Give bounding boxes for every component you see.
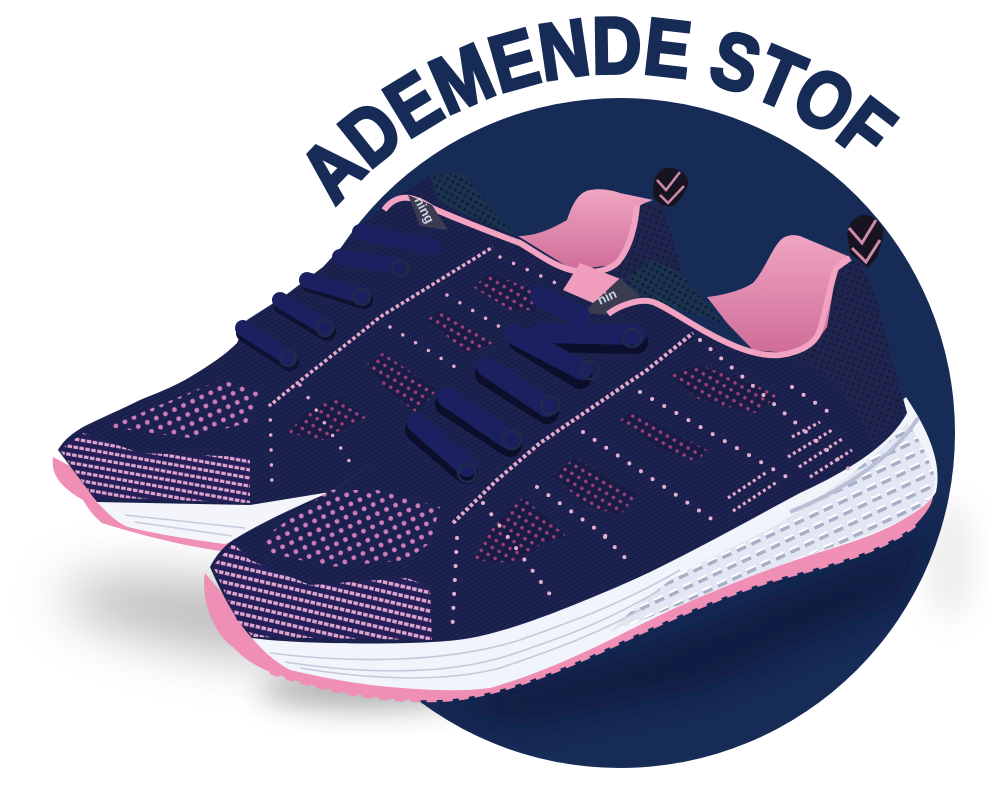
back shoe upper [58, 172, 682, 505]
back shoe midsole [95, 485, 340, 544]
front shoe tongue teal [627, 260, 723, 323]
front shoe midsole [252, 397, 938, 690]
front shoe knit panels [473, 365, 780, 563]
front shoe [204, 215, 938, 700]
back shoe lining [518, 189, 653, 270]
front shoe heel stripes [728, 422, 852, 511]
back shoe laces [243, 232, 433, 362]
front shoe brand label: nin [595, 286, 619, 308]
front shoe eyelets [458, 329, 641, 482]
front shoe tread [610, 423, 936, 632]
background circle [285, 98, 955, 768]
front shoe heel knit [780, 260, 907, 440]
front shoe toe dot field [260, 490, 440, 567]
back shoe collar [384, 198, 637, 272]
title: ADEMENDE STOF [306, 16, 900, 208]
back shoe knit panels [287, 273, 537, 440]
front shoe brand label [583, 278, 640, 315]
back shoe eyelets [280, 260, 408, 366]
back shoe [53, 168, 688, 551]
back shoe toe stripes [60, 433, 250, 503]
ground shadow [57, 500, 975, 710]
front shoe heel tab [847, 215, 883, 268]
back shoe heel tab [653, 168, 688, 207]
front shoe main seam [453, 333, 693, 523]
front shoe sparse dots [452, 340, 850, 635]
front shoe laces [417, 296, 636, 472]
front shoe pink tongue [563, 263, 623, 303]
front shoe midsole grooves [270, 570, 680, 678]
back shoe sparse dots [270, 257, 560, 490]
front shoe toe stripes [213, 543, 432, 640]
front shoe lining [707, 235, 850, 353]
back shoe seam [273, 247, 493, 403]
front shoe sole scallops [270, 525, 915, 700]
back shoe brand label: ning [411, 194, 438, 226]
back shoe tongue [430, 172, 516, 236]
back shoe toe dot field [107, 380, 260, 438]
front shoe collar [608, 258, 850, 355]
front shoe heel groove [790, 418, 918, 512]
front shoe upper [210, 260, 907, 644]
back shoe heel knit [610, 203, 682, 300]
back shoe brand label [408, 194, 448, 230]
front shoe sole [204, 497, 933, 700]
back shoe sole [53, 457, 300, 551]
shadow on circle [440, 520, 940, 725]
